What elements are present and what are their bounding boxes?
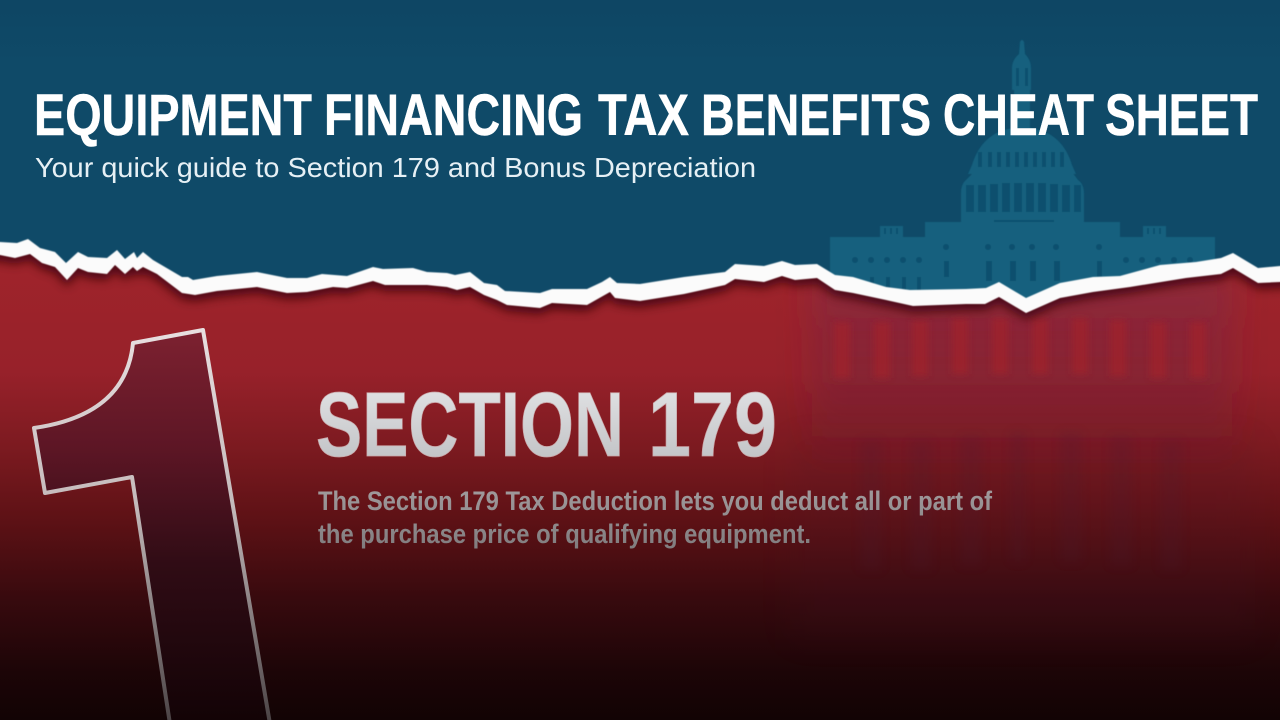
shadow under torn paper	[0, 236, 1280, 319]
section heading: SECTION	[316, 374, 624, 476]
title: FINANCING	[324, 83, 583, 148]
title	[34, 83, 1258, 148]
title: CHEAT	[943, 83, 1094, 148]
capitol drum	[961, 172, 1084, 224]
torn paper strip	[0, 239, 1280, 313]
capitol dome	[968, 90, 1076, 174]
icon: capitol building silhouette	[830, 40, 1215, 312]
capitol central block	[925, 222, 1120, 237]
capitol windows	[852, 68, 1193, 291]
section description	[318, 486, 993, 549]
section description: the purchase price of qualifying equipment.	[318, 519, 811, 549]
subtitle: Your quick guide to Section 179 and Bonus Depreciation	[35, 152, 756, 183]
section heading: 179	[648, 374, 777, 476]
panel: blue header background	[0, 0, 1280, 304]
title: EQUIPMENT	[34, 83, 312, 148]
capitol spire and lantern	[1012, 40, 1031, 90]
title: TAX	[598, 83, 689, 148]
title: BENEFITS	[701, 83, 931, 148]
section description: The Section 179 Tax Deduction lets you deduct all or part of	[318, 486, 993, 516]
faded capitol reflection on red	[790, 270, 1255, 640]
big numeral 1	[34, 330, 270, 720]
capitol wings	[830, 226, 1215, 290]
panel: red background	[0, 240, 1280, 720]
